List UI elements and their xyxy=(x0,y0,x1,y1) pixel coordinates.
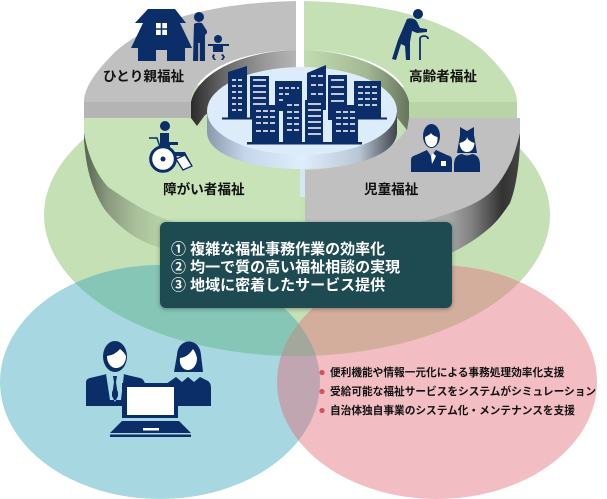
segment wall: lower right xyxy=(400,118,520,262)
callout: three goals: ① 複雑な福祉事務作業の効率化 xyxy=(171,240,385,258)
segment: lower left disability xyxy=(84,118,300,240)
icon: house and family xyxy=(131,9,229,61)
segment: top left single parent xyxy=(84,1,296,118)
labels: segment names: 障がい者福祉 xyxy=(163,181,245,197)
segment: lower right children xyxy=(305,118,520,240)
icon: wheelchair user xyxy=(149,121,192,171)
icon: school children xyxy=(411,124,480,172)
disk: concentric welfare segments xyxy=(84,1,520,262)
inner wall: left xyxy=(191,50,296,126)
labels: segment names xyxy=(103,68,477,197)
list: support services: 自治体独自事業のシステム化・メンテナンスを支援 xyxy=(330,404,575,417)
pedestal top xyxy=(207,67,397,155)
labels: segment names: 高齢者福祉 xyxy=(409,68,477,84)
icon: city buildings xyxy=(222,65,387,144)
pedestal strip xyxy=(300,165,305,197)
labels: segment names: 児童福祉 xyxy=(364,182,419,197)
list: support services: 受給可能な福祉サービスをシステムがシミュレーション xyxy=(330,385,596,398)
callout: three goals: ② 均一で質の高い福祉相談の実現 xyxy=(171,258,400,276)
icon: two staff at laptop xyxy=(86,341,211,437)
icon: elderly person with cane xyxy=(392,9,428,60)
inner wall: right xyxy=(304,50,409,130)
segment: top right elderly xyxy=(304,1,517,118)
circle: pink services xyxy=(277,265,597,499)
callout: three goals xyxy=(160,222,452,308)
pedestal wall xyxy=(207,112,397,169)
labels: segment names: ひとり親福祉 xyxy=(103,69,185,84)
circle: blue staff xyxy=(0,265,320,499)
list: support services: 便利機能や情報一元化による事務処理効率化支援 xyxy=(330,366,565,379)
circle: green welfare xyxy=(44,74,550,356)
callout: three goals: ③ 地域に密着したサービス提供 xyxy=(171,276,385,294)
list: support services xyxy=(319,366,596,417)
segment wall: lower left xyxy=(84,118,300,262)
